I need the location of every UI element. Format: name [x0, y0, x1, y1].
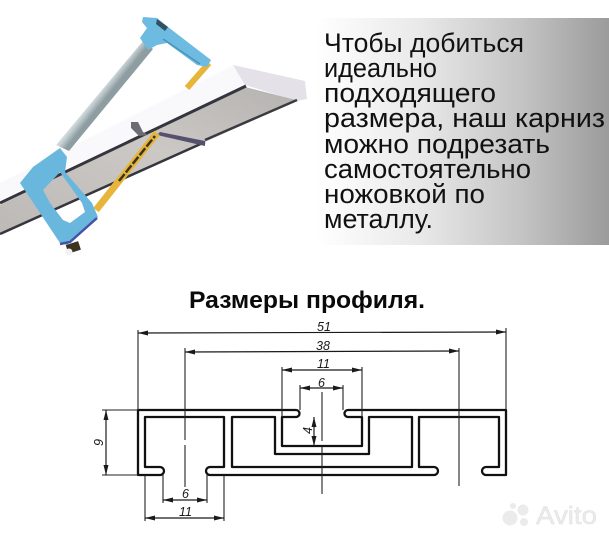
- dimension 9: [92, 410, 108, 475]
- description text: [324, 28, 605, 234]
- dimension 11 top: 11: [317, 357, 330, 371]
- heading: Размеры профиля.: [189, 287, 425, 314]
- dimension 51: 51: [317, 320, 331, 334]
- description text: можно подрезать: [324, 129, 550, 159]
- dimension 4: 4: [301, 427, 315, 434]
- dimension 11 bottom: [145, 505, 224, 520]
- dimension 6 top: [300, 376, 343, 390]
- dimension 6 top: 6: [318, 376, 325, 390]
- dimension 6 bottom: [163, 487, 207, 502]
- wing nut: [66, 241, 81, 256]
- watermark: Avito: [502, 502, 597, 530]
- top grip: [140, 17, 211, 67]
- photo: curtain rail profile cut with hacksaw: [0, 17, 307, 256]
- description text: ножовкой по: [324, 179, 485, 209]
- icon: Avito paws: [502, 503, 528, 526]
- profile outline: [138, 410, 506, 475]
- hacksaw: [20, 17, 211, 256]
- description text: размера, наш карниз: [324, 103, 605, 133]
- handle: [20, 148, 98, 245]
- description text: подходящего: [324, 78, 496, 108]
- extension and centre lines: [102, 328, 506, 521]
- dimension lines with arrows: [92, 320, 506, 520]
- description text: самостоятельно: [324, 154, 531, 184]
- gradient text panel: [317, 18, 609, 245]
- dimension 4: [301, 417, 316, 446]
- description text: Чтобы добиться: [324, 28, 524, 58]
- technical drawing of profile: [92, 320, 506, 521]
- description text: идеально: [324, 53, 437, 83]
- rail: [0, 65, 307, 234]
- description text: металлу.: [324, 204, 433, 234]
- dimension 11 bottom: 11: [179, 505, 192, 519]
- dimension 38: 38: [316, 339, 330, 353]
- dimension 9: 9: [92, 439, 106, 446]
- blade: [96, 133, 157, 210]
- dimension 11 top: [282, 357, 362, 372]
- watermark: Avito: Avito: [536, 502, 597, 530]
- dimension 6 bottom: 6: [182, 487, 189, 501]
- dimension 51: [138, 320, 506, 336]
- silver bar: [56, 41, 153, 151]
- dimension 38: [185, 339, 459, 354]
